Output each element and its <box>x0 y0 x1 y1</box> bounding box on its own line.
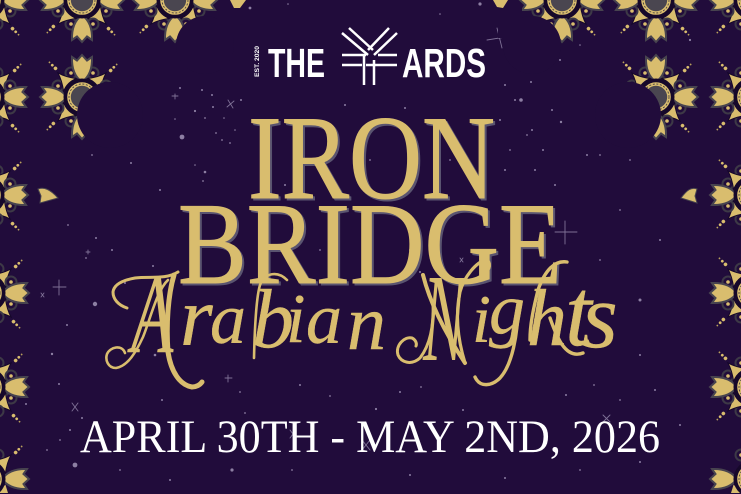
script flourishes <box>106 260 583 387</box>
title: Iron Bridge <box>178 91 562 309</box>
logo text: the: THE <box>268 40 325 86</box>
ornament: right column flowers <box>681 153 741 493</box>
subtitle capital A: A <box>127 253 174 377</box>
subtitle: Arabian Nights: a <box>210 279 246 359</box>
subtitle: Arabian Nights: s <box>582 265 618 367</box>
subtitle: Arabian Nights: n <box>347 279 386 366</box>
subtitle: Arabian Nights: g <box>489 269 525 349</box>
subtitle: Arabian Nights: r <box>180 271 213 364</box>
subtitle: Arabian Nights: h <box>527 275 567 363</box>
title line: Iron: IRON <box>248 91 495 224</box>
subtitle: Arabian Nights: a <box>306 279 342 359</box>
logo text: ards: ARDS <box>402 40 486 86</box>
subtitle: Arabian Nights: i <box>286 281 305 358</box>
subtitle: Arabian Nights <box>106 250 618 388</box>
subtitle: Arabian Nights: i <box>472 281 491 357</box>
subtitle capital N: N <box>422 250 468 388</box>
ornament: second row right flowers <box>595 55 741 148</box>
subtitle: Arabian Nights: b <box>252 273 294 366</box>
logo text: est. 2020: EST. 2020 <box>254 46 261 77</box>
date line: APRIL 30TH - MAY 2ND, 2026 <box>80 411 660 463</box>
logo: The Yards <box>254 28 486 86</box>
subtitle: Arabian Nights: t <box>565 259 594 366</box>
ornament: second row left flowers <box>0 55 143 148</box>
sparkles <box>41 28 645 450</box>
ornament: top row flowers <box>0 0 741 74</box>
logo icon: Y mark <box>342 28 397 85</box>
ornament: left column flowers <box>0 153 58 493</box>
title line: Bridge: BRIDGE <box>178 180 562 309</box>
